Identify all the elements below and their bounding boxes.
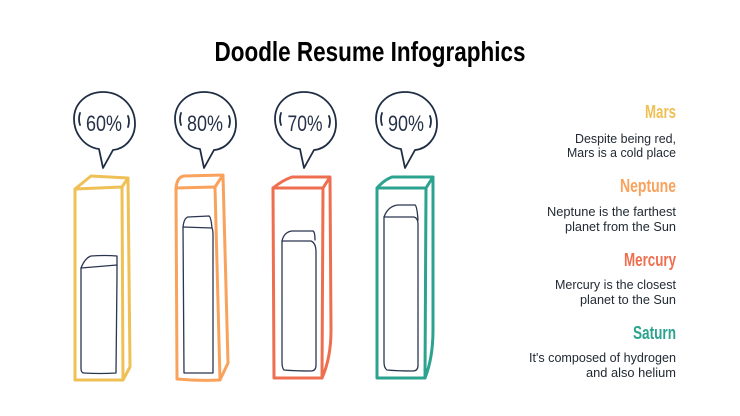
legend: Mercury: Mercury is the closest <box>555 277 676 292</box>
outer column: Saturn <box>377 177 433 378</box>
title: Doodle Resume Infographics <box>214 36 526 67</box>
legend: Mars: Mars is a cold place <box>567 145 676 160</box>
legend: Neptune: Neptune <box>620 176 676 196</box>
speech bubble: 70% <box>275 92 336 168</box>
inner bar: 70% <box>282 231 316 371</box>
inner bar: 80% <box>183 216 213 373</box>
speech bubble: 60% <box>74 92 135 168</box>
legend: Saturn <box>529 323 676 380</box>
legend: Mars: Mars <box>645 102 676 122</box>
outer column: Mars <box>75 176 130 380</box>
inner bar: 60% <box>81 256 117 374</box>
legend: Neptune: Neptune is the farthest <box>547 204 676 219</box>
legend: Mercury: planet to the Sun <box>580 292 676 307</box>
speech bubble: 90% <box>376 92 437 168</box>
legend: Mars <box>567 102 676 160</box>
speech bubble: 90%: 90% <box>388 111 424 136</box>
speech bubble: 60%: 60% <box>86 111 122 136</box>
legend: Neptune: planet from the Sun <box>565 219 676 234</box>
inner bar: 90% <box>384 205 418 371</box>
legend: Neptune <box>547 176 676 234</box>
outer column: Neptune <box>176 175 228 380</box>
speech bubble: 70%: 70% <box>288 111 322 136</box>
legend: Saturn: and also helium <box>586 365 676 380</box>
speech bubble: 80%: 80% <box>187 111 223 136</box>
legend: Mars: Despite being red, <box>575 131 676 146</box>
legend: Saturn: It's composed of hydrogen <box>529 350 676 365</box>
legend: Saturn: Saturn <box>633 323 676 343</box>
outer column: Mercury <box>273 177 331 378</box>
legend: Mercury: Mercury <box>624 250 676 270</box>
legend: Mercury <box>555 250 676 307</box>
speech bubble: 80% <box>175 92 236 168</box>
